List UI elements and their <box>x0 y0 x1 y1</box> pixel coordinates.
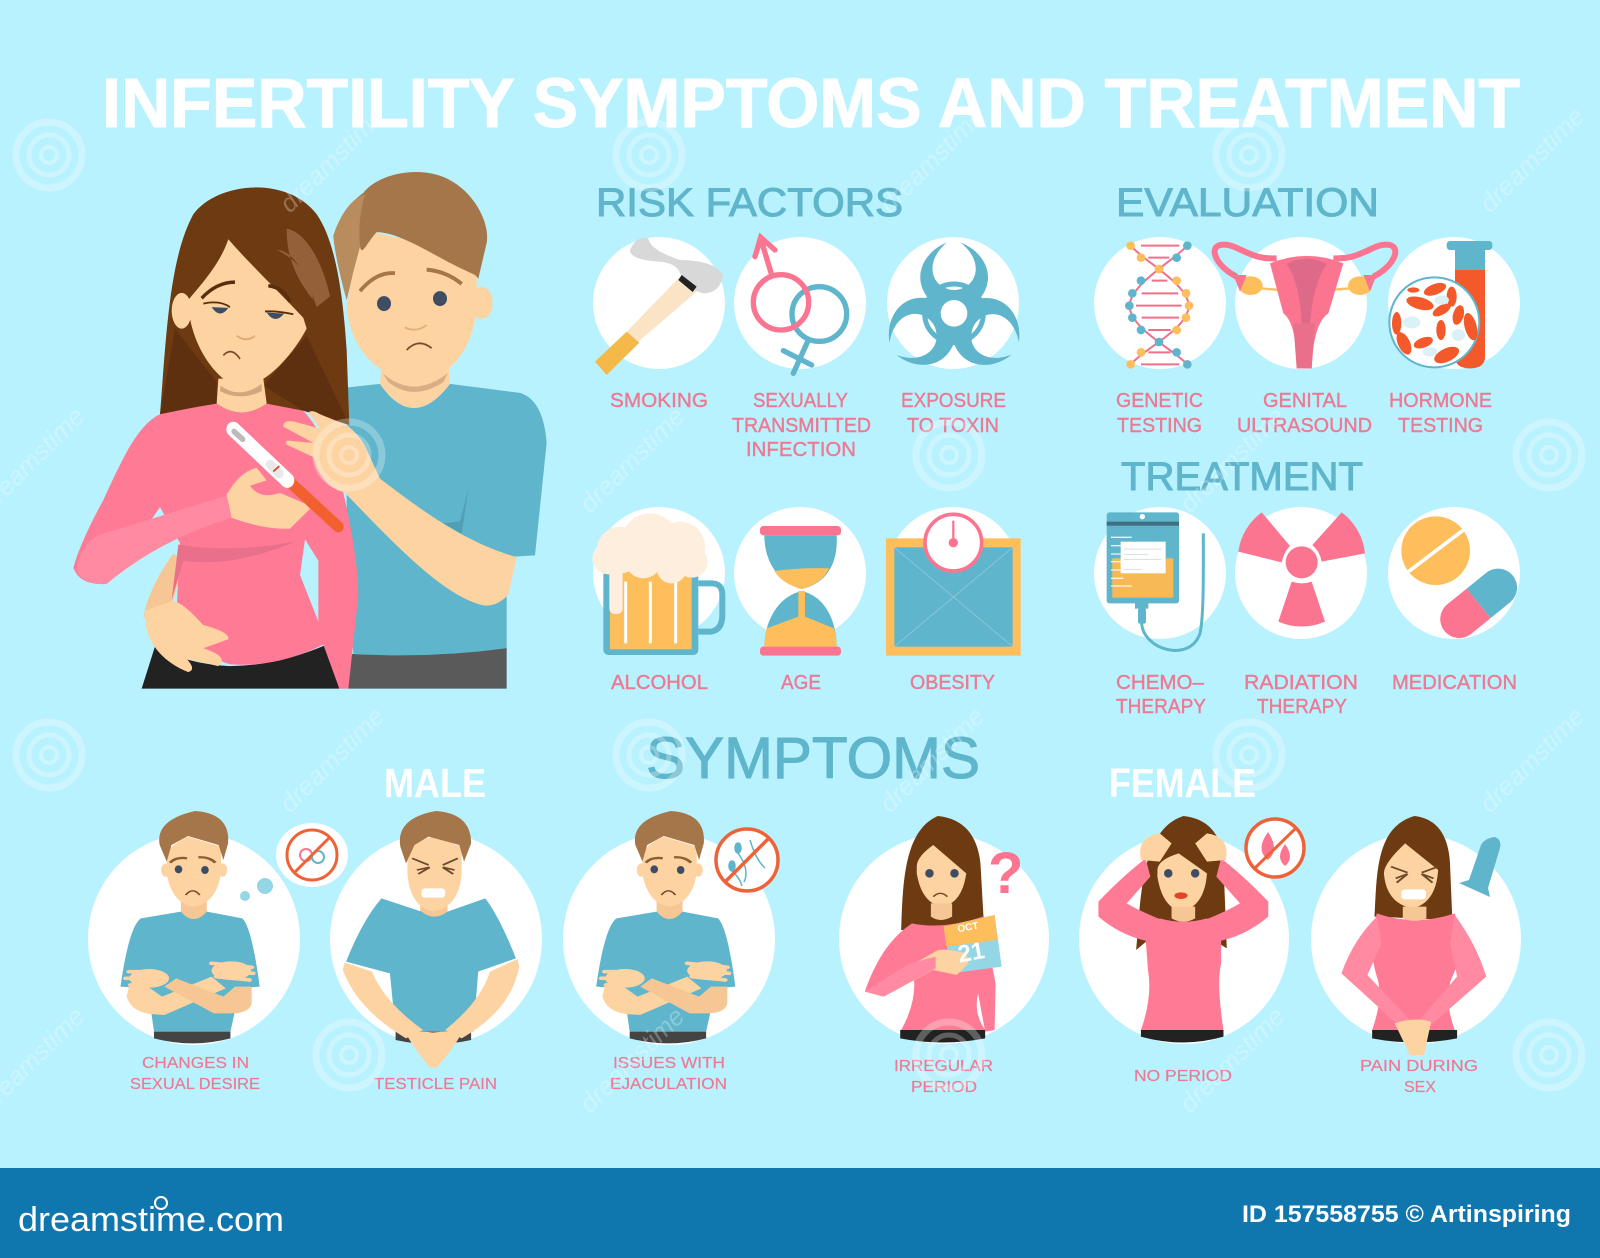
panel: issues with ejaculation <box>563 811 778 1093</box>
woman trousers <box>142 645 339 689</box>
labels: risk factors: TO TOXIN <box>907 415 999 437</box>
section: treatment <box>1094 455 1525 718</box>
figure: man with crossed arms <box>120 811 260 1043</box>
thought bubble <box>240 823 348 901</box>
circle <box>1079 834 1289 1044</box>
labels: risk factors: SMOKING <box>610 390 708 412</box>
title: INFERTILITY SYMPTOMS AND TREATMENT <box>102 64 1520 142</box>
labels: treatment: RADIATION <box>1244 672 1358 694</box>
watermark overlay: dreamstime <box>273 701 390 818</box>
labels: risk factors: ALCOHOL <box>611 672 708 694</box>
woman forearm <box>77 495 232 584</box>
woman top <box>73 404 358 689</box>
labels: risk factors: TRANSMITTED <box>732 415 871 437</box>
figure: woman with calendar <box>865 816 1002 1042</box>
watermark overlay: dreamstime <box>1473 701 1590 818</box>
question mark: ? <box>988 841 1023 906</box>
labels: evaluation <box>1116 390 1492 437</box>
labels: treatment: THERAPY <box>1257 696 1347 718</box>
labels: risk factors: OBESITY <box>910 672 995 694</box>
label: PAIN DURING <box>1360 1058 1478 1075</box>
calendar text: OCT <box>957 921 979 935</box>
illustration: sad couple with pregnancy test <box>73 172 547 689</box>
label: IRREGULAR <box>894 1058 993 1075</box>
labels: risk factors <box>610 390 1006 694</box>
figure: man with crossed arms <box>596 811 735 1043</box>
labels: risk factors: AGE <box>781 672 821 694</box>
label <box>610 1055 727 1093</box>
labels: evaluation: TESTING <box>1398 415 1483 437</box>
circle <box>839 834 1049 1044</box>
figure: woman in pain <box>1341 816 1486 1055</box>
label <box>894 1058 993 1096</box>
figure: man in pain <box>343 811 519 1067</box>
label: CHANGES IN <box>142 1055 249 1072</box>
gap at waist <box>300 539 318 621</box>
circle <box>330 833 542 1045</box>
figure: woman holding head <box>1098 816 1268 1042</box>
man hand on waist <box>145 601 228 672</box>
icon: gender symbols <box>753 237 847 373</box>
labels: risk factors: INFECTION <box>746 439 856 461</box>
icon: no sperm sign <box>716 829 778 891</box>
pregnancy test <box>233 429 338 527</box>
image id and credit: ID 157558755 © Artinspiring <box>1242 1201 1571 1228</box>
woman hand <box>227 468 310 529</box>
man neck <box>380 364 450 408</box>
man arm around waist <box>143 554 183 618</box>
circle <box>88 833 300 1045</box>
icon: condom <box>1459 837 1500 897</box>
labels: treatment <box>1116 672 1517 718</box>
heading: treatment: TREATMENT <box>1121 455 1363 499</box>
panel: testicle pain <box>330 811 542 1093</box>
icon: pills <box>1401 516 1525 646</box>
icon: test tube and blood cells <box>1389 241 1492 368</box>
watermark overlay: dreamstime <box>1473 101 1590 218</box>
icon: beer mug <box>592 513 722 655</box>
label <box>1360 1058 1478 1096</box>
label <box>130 1055 260 1093</box>
heading: symptoms: SYMPTOMS <box>646 726 980 791</box>
label: SEXUAL DESIRE <box>130 1076 260 1093</box>
label: SEX <box>1404 1079 1436 1096</box>
circles <box>1094 507 1520 639</box>
icon: hourglass <box>760 526 841 656</box>
icon: biohazard <box>876 243 1032 378</box>
label: ISSUES WITH <box>613 1055 725 1072</box>
watermark overlay: dreamstime <box>273 101 390 218</box>
calendar text: 21 <box>956 937 987 968</box>
labels: risk factors: EXPOSURE <box>901 390 1006 412</box>
panel: irregular period <box>839 816 1049 1096</box>
man forearm and hand <box>283 411 517 606</box>
labels: treatment: THERAPY <box>1116 696 1206 718</box>
man trousers <box>348 648 507 689</box>
icon: radiation symbol <box>1238 512 1365 627</box>
heading: female: FEMALE <box>1109 760 1256 806</box>
watermark overlay: dreamstime <box>573 1001 690 1118</box>
watermark overlay: dreamstime <box>873 101 990 218</box>
heading: risk factors: RISK FACTORS <box>596 181 903 225</box>
section: evaluation <box>1094 181 1520 437</box>
labels: risk factors: SEXUALLY <box>753 390 848 412</box>
man face <box>347 229 493 392</box>
heading: male: MALE <box>384 760 486 806</box>
labels: evaluation: HORMONE <box>1389 390 1492 412</box>
labels: evaluation: GENETIC <box>1116 390 1203 412</box>
man shirt <box>347 384 547 656</box>
footer logo: dreamstime.com <box>18 1201 284 1239</box>
labels: treatment: MEDICATION <box>1392 672 1517 694</box>
icon: no drops sign <box>1246 819 1304 877</box>
shirt fold <box>443 489 468 534</box>
panel: changes in sexual desire <box>88 811 348 1093</box>
labels: evaluation: TESTING <box>1117 415 1202 437</box>
watermark overlay: dreamstime <box>1173 1001 1290 1118</box>
calendar <box>944 915 1002 973</box>
labels: evaluation: GENITAL <box>1263 390 1347 412</box>
watermark overlay: dreamstime <box>573 401 690 518</box>
circles <box>593 237 1019 639</box>
shading under bust <box>172 541 297 600</box>
man hair <box>333 172 487 300</box>
panel: pain during sex <box>1311 816 1521 1096</box>
footer bar <box>0 1168 1600 1258</box>
icon: scale <box>886 514 1021 656</box>
label: PERIOD <box>911 1079 977 1096</box>
woman hair <box>160 187 349 425</box>
circle <box>1311 834 1521 1044</box>
section: risk factors <box>592 181 1032 694</box>
icon: uterus <box>1215 245 1395 368</box>
circles <box>1094 237 1520 369</box>
calendar text <box>953 920 987 968</box>
label: TESTICLE PAIN <box>374 1076 497 1093</box>
heading: evaluation: EVALUATION <box>1116 181 1379 225</box>
circle <box>563 833 775 1045</box>
icon: chemotherapy bag <box>1107 512 1203 650</box>
labels: evaluation: ULTRASOUND <box>1237 415 1372 437</box>
forearm and hand <box>865 950 969 997</box>
panel: no period <box>1079 816 1304 1085</box>
label: NO PERIOD <box>1134 1068 1232 1085</box>
icon: DNA <box>1125 241 1193 369</box>
watermark overlay: dreamstime <box>873 701 990 818</box>
watermark overlay: dreamstime <box>1173 401 1290 518</box>
woman neck <box>217 379 267 412</box>
icon: cigarette <box>595 238 723 375</box>
label: EJACULATION <box>610 1076 727 1093</box>
woman face <box>172 239 307 396</box>
labels: treatment: CHEMO– <box>1116 672 1205 694</box>
